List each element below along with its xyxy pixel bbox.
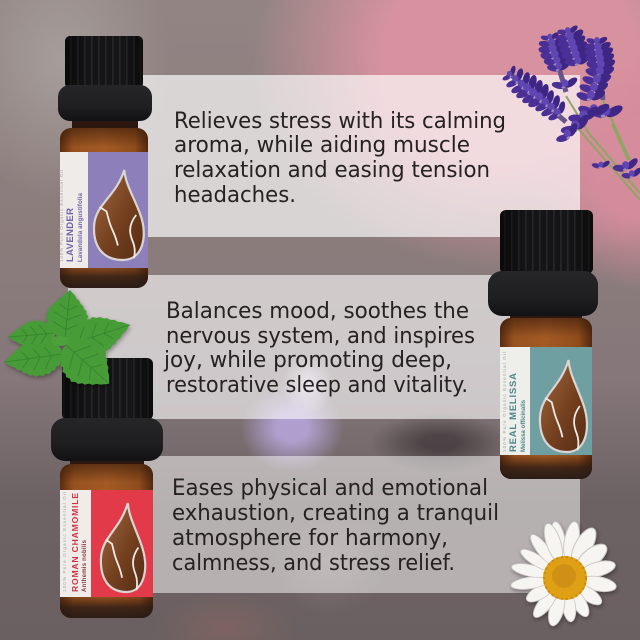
text block: lavender benefits: headaches. bbox=[174, 183, 296, 208]
bottle: real melissa bbox=[488, 210, 598, 479]
bottle: lavender bbox=[58, 36, 152, 288]
bottle: roman chamomile bbox=[51, 358, 163, 618]
text block: lavender benefits: relaxation and easing tension bbox=[174, 158, 490, 183]
bottle: real melissa: 100% Pure Organic Essential Oil bbox=[502, 352, 507, 452]
bottle: roman chamomile: ROMAN CHAMOMILE bbox=[70, 493, 80, 592]
bottle: lavender: Lavandula angustifolia bbox=[78, 192, 84, 262]
text block: lavender benefits bbox=[174, 109, 506, 208]
bottle: lavender: 100% Pure Organic Essential Oil bbox=[59, 170, 64, 262]
text block: chamomile benefits: Eases physical and emotional bbox=[172, 476, 488, 501]
text block: melissa benefits: nervous system, and inspires bbox=[166, 324, 475, 349]
bottle: lavender: LAVENDER bbox=[65, 208, 76, 262]
text block: chamomile benefits bbox=[172, 476, 499, 576]
text block: lavender benefits: aroma, while aiding muscle bbox=[174, 133, 470, 158]
panel: lavender backdrop bbox=[100, 75, 580, 237]
bottle: roman chamomile: Anthemis nobilis bbox=[82, 539, 88, 592]
text block: chamomile benefits: calmness, and stress relief. bbox=[172, 551, 455, 576]
text block: melissa benefits bbox=[163, 299, 475, 398]
text block: melissa benefits: restorative sleep and vitality. bbox=[166, 373, 468, 398]
text block: lavender benefits: Relieves stress with its calming bbox=[174, 109, 506, 134]
icon: daisy flower bbox=[510, 520, 617, 628]
bottle: real melissa: Melissa officinalis bbox=[521, 399, 527, 452]
icon: lavender sprig bbox=[500, 23, 640, 200]
panel: chamomile backdrop bbox=[110, 456, 580, 593]
icon: mint leaves bbox=[2, 288, 136, 401]
panel: melissa backdrop bbox=[68, 275, 546, 419]
bottle: roman chamomile: 100% Pure Organic Essential Oil bbox=[62, 492, 67, 592]
text block: melissa benefits: Balances mood, soothes the bbox=[166, 299, 469, 324]
text block: chamomile benefits: atmosphere for harmony, bbox=[172, 526, 448, 551]
text block: melissa benefits: joy, while promoting deep, bbox=[163, 348, 452, 373]
text block: chamomile benefits: exhaustion, creating a tranquil bbox=[172, 501, 499, 526]
bottle: real melissa: REAL MELISSA bbox=[508, 373, 519, 452]
